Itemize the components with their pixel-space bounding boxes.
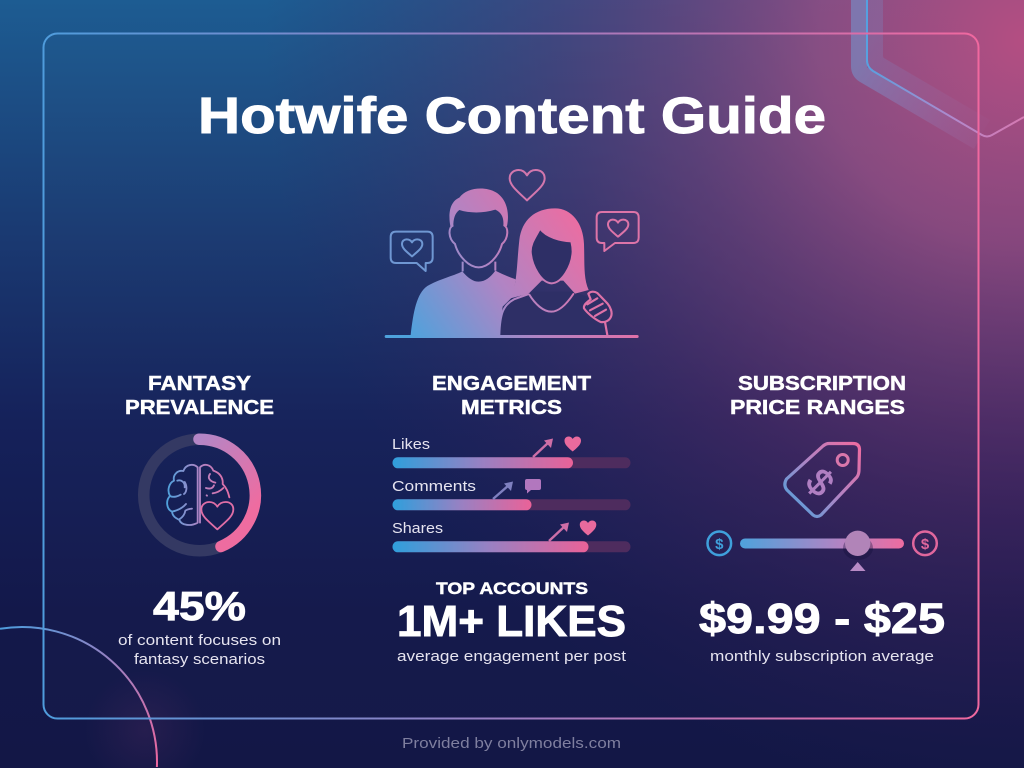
- row: shares: Shares: [392, 520, 443, 537]
- icon: low price coin: [708, 532, 731, 555]
- description: [118, 632, 281, 668]
- bar chart: [392, 436, 630, 552]
- description: monthly subscription average: [710, 648, 934, 665]
- icon: woman: [499, 208, 612, 335]
- icon: brain with heart: [167, 465, 233, 529]
- icon: low price coin: $: [715, 536, 724, 553]
- description: of content focuses on: [118, 632, 281, 649]
- heading: FANTASY: [148, 373, 252, 395]
- icon: price tag: [785, 444, 860, 516]
- panel: subscription price ranges: [699, 373, 945, 665]
- heading: METRICS: [461, 397, 562, 419]
- heading: PREVALENCE: [125, 397, 274, 419]
- row: comments: [392, 478, 630, 510]
- decorative circle, bottom left: [0, 627, 157, 767]
- subheading: TOP ACCOUNTS: [436, 579, 588, 598]
- donut chart: 45%: [144, 439, 255, 551]
- description: average engagement per post: [397, 648, 627, 665]
- row: shares: [392, 520, 630, 552]
- icon: hand on shoulder: [584, 292, 612, 335]
- panel: engagement metrics: [392, 373, 630, 665]
- heading: ENGAGEMENT: [432, 373, 591, 395]
- heading: PRICE RANGES: [730, 397, 905, 419]
- heading: [125, 373, 274, 419]
- title: Hotwife Content Guide: [198, 87, 826, 144]
- icon: high price coin: [913, 532, 937, 555]
- icon: price tag: $: [798, 461, 842, 504]
- stat: 1M+ likes: 1M+ LIKES: [397, 597, 626, 646]
- price slider: [708, 531, 937, 571]
- stat: price range: $9.99 - $25: [699, 595, 945, 643]
- illustration: couple with hearts: [385, 170, 639, 338]
- icon: right speech bubble: [597, 212, 639, 251]
- heading: [432, 373, 591, 419]
- heading: [730, 373, 906, 419]
- icon: man: [411, 188, 516, 335]
- icon: ground line: [385, 335, 639, 338]
- row: likes: [392, 436, 630, 468]
- panel: fantasy prevalence: [118, 373, 281, 668]
- icon: floating heart: [510, 170, 545, 200]
- row: comments: Comments: [392, 478, 476, 495]
- decorative hexagon, top right: [859, 0, 1024, 142]
- icon: left speech bubble: [391, 232, 433, 271]
- description: fantasy scenarios: [134, 651, 265, 668]
- icon: high price coin: $: [921, 536, 930, 553]
- stat: 45%: 45%: [153, 583, 246, 629]
- row: likes: Likes: [392, 436, 430, 453]
- heading: SUBSCRIPTION: [738, 373, 906, 395]
- footer: Provided by onlymodels.com: [402, 735, 621, 752]
